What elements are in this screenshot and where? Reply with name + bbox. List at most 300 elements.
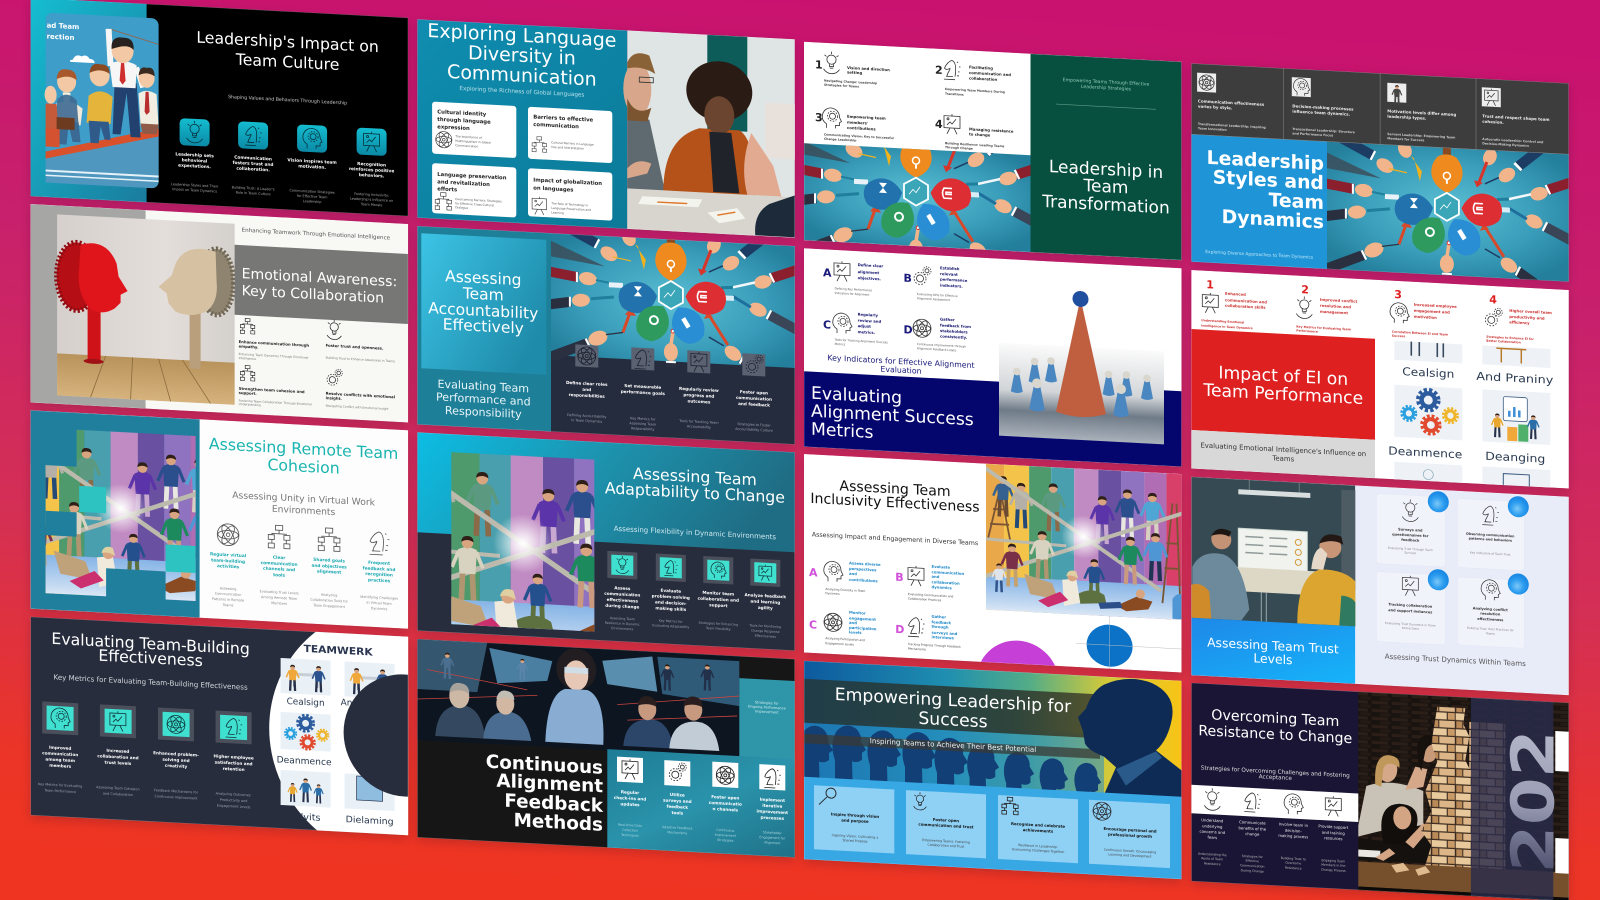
- column: team motivation: Communication Strategies: [290, 188, 335, 195]
- metric: collaboration: Assessing Team Cohesion: [96, 785, 140, 791]
- item C: Analyzing Participation and: [825, 636, 865, 642]
- metric: collaboration: collaboration and: [97, 753, 139, 760]
- column: feedback: recognition: [365, 571, 393, 579]
- item 2: communication and: [969, 70, 1011, 77]
- column: feedback: feedback and: [363, 565, 395, 573]
- item 3: Correlation Between EI and Team: [1392, 330, 1448, 337]
- item 1: setting: [847, 69, 862, 75]
- column: shared goals: Analyzing: [321, 593, 337, 598]
- title: Levels: [1253, 650, 1292, 667]
- slide: Emotional Awareness: [31, 204, 408, 423]
- column: behavioral expectations: expectations.: [178, 163, 211, 170]
- item D: feedback from: [940, 323, 971, 329]
- item C: engagement: [849, 615, 876, 622]
- card: surveys: Surveys: [1405, 551, 1417, 555]
- metric: problem solving: Continuous Improvement: [154, 794, 198, 801]
- item B: Alignment Assessment: [917, 296, 951, 302]
- column: problem solving: Evaluating Adaptability: [652, 623, 689, 629]
- card: surveys: [1376, 488, 1449, 567]
- column: agility: Effectiveness: [755, 634, 776, 639]
- book-shaped cartoon illustration: [45, 12, 159, 188]
- item 4: [935, 113, 1014, 153]
- card: cultural identity: The Importance of: [454, 134, 483, 140]
- column: channels: n channels: [713, 806, 739, 813]
- slide: Leadership's Impact on Team Culture: [31, 0, 408, 216]
- item C: [823, 310, 888, 349]
- column: feedback: Foster open: [740, 389, 768, 396]
- item 4: Better Collaboration: [1486, 339, 1521, 344]
- column: problem solving: Evaluate: [661, 588, 681, 594]
- card: preservation: Dialogue: [455, 205, 468, 210]
- team cards: Deanging: [1485, 450, 1545, 466]
- slide: Assessing Team Accountability: [417, 197, 811, 445]
- column: trust: Autocratic Leadership: Control and: [1482, 137, 1543, 144]
- metric: problem solving: Enhanced problem-: [153, 750, 199, 758]
- item 1: Intelligence in Team Dynamics: [1201, 324, 1253, 330]
- column: collaboration: Team Flexibility: [705, 626, 731, 631]
- column: feedback: Identifying Challenges: [360, 595, 398, 601]
- card: observing: Observing communication: [1466, 532, 1515, 538]
- card: conflict: Building Trust: Best Practices for: [1467, 626, 1514, 632]
- item 2: Empowering Team Members During: [945, 87, 1005, 94]
- column: review: outcomes: [687, 398, 711, 405]
- column: trust: Trust and respect shape team: [1482, 113, 1550, 122]
- card: achievements: Recognize and celebrate: [1011, 821, 1065, 829]
- item: cohesion: Strengthen team cohesion and: [239, 386, 305, 394]
- title: Emotional Awareness:: [242, 266, 397, 290]
- column: communication: Resilience in Dynamic: [605, 621, 640, 627]
- slide: Assessing Remote Team Cohesion: [30, 410, 408, 629]
- item A: alignment: [858, 269, 879, 275]
- column: team-building: Patterns in Remote: [212, 597, 244, 603]
- side subtitle: Strategies for: [755, 700, 779, 706]
- item B: Collaboration Practices: [908, 597, 942, 602]
- column: communication: Communication effectiveness: [1198, 98, 1265, 107]
- column: team-building: activities: [217, 563, 240, 570]
- subtitle: Strategies for Overcoming Challenges and Fostering: [1201, 766, 1350, 779]
- subtitle: Assessing Unity in Virtual Work: [232, 490, 376, 509]
- blue title panel: [1191, 618, 1355, 684]
- title: Assessing Team: [839, 478, 951, 500]
- column: iterate: Implement: [760, 797, 785, 803]
- column: team-building: Teams: [222, 603, 234, 608]
- column: agility: Change Response: [751, 628, 780, 634]
- blue title panel: [1191, 134, 1327, 269]
- title: Team: [1269, 190, 1324, 214]
- crew illustration: [451, 452, 594, 632]
- item 1: Vision and direction: [847, 65, 890, 72]
- title: Team Performance: [1202, 381, 1363, 409]
- column: concerns: fears: [1208, 835, 1217, 840]
- card: barriers: Use and Interpretation: [551, 145, 584, 151]
- column: check-ins: check-ins and: [614, 795, 646, 802]
- item 2: collaboration: [969, 75, 997, 82]
- column: problem solving: and decision-: [655, 599, 687, 606]
- metric: collaboration: trust levels: [105, 760, 132, 766]
- column: trust: Decision-Making Dynamics: [1482, 141, 1529, 148]
- card: globalization: on languages: [533, 185, 573, 194]
- card: preservation: for Effective Cross-Cultural: [455, 201, 494, 207]
- title: Feedback: [504, 791, 604, 817]
- column: review: Accountability: [687, 424, 711, 430]
- item D: D: [895, 623, 904, 636]
- card: vision: Shared Purpose: [842, 838, 868, 844]
- column: feedback: [735, 353, 773, 433]
- team cards: And Praniny: [1476, 370, 1554, 387]
- column: shared goals: Collaboration Tools for: [310, 598, 349, 604]
- column: support: [1318, 795, 1349, 873]
- column: review: [678, 350, 719, 430]
- item: empathy: Enhancing Team Dynamics Through Emotional: [239, 352, 308, 360]
- item C: Regularly: [858, 312, 879, 318]
- column: channels: Clear: [273, 555, 286, 561]
- column: recognition: Leadership's Influence on: [350, 197, 393, 203]
- column: support: resources: [1324, 835, 1343, 841]
- item 2: Performance: [1296, 329, 1318, 334]
- item 3: 3: [1394, 288, 1402, 301]
- column: collaboration: [698, 556, 739, 632]
- column: recognition: Team Morale: [360, 202, 382, 207]
- column: feedback: in Virtual Team: [366, 601, 392, 606]
- column: channels: communication: [261, 560, 298, 568]
- card: preservation: and revitalization: [437, 179, 490, 188]
- column: concerns: Understand: [1201, 817, 1224, 823]
- item C: metrics.: [858, 329, 876, 335]
- item B: and: [932, 574, 940, 579]
- item A: [809, 558, 881, 598]
- column: communication: Team Innovation: [1198, 126, 1227, 132]
- item B: Evaluate: [932, 564, 950, 570]
- column: behavioral expectations: Leadership Styles and Their: [171, 182, 219, 189]
- book-shaped cartoon illustration: rection: [47, 33, 74, 42]
- title: Transformation: [1041, 192, 1170, 219]
- item 1: [815, 51, 890, 90]
- column: support: Change Process: [1321, 868, 1346, 873]
- jenga photo: [1358, 692, 1569, 900]
- slide: Evaluating Alignment Success Metrics: [804, 248, 1182, 467]
- column: roles: responsibilities: [569, 392, 605, 399]
- card: cultural identity: through language: [437, 117, 491, 126]
- item 2: [1296, 283, 1357, 336]
- item 4: efficiency: [1509, 319, 1530, 325]
- subtitle: Exploring Diverse Approaches to Team Dynamics: [1205, 249, 1314, 261]
- column: check-ins: [614, 756, 646, 838]
- column: recognition: [349, 127, 394, 208]
- subtitle: Evaluation: [880, 365, 922, 376]
- card: preservation: [432, 163, 516, 218]
- column: collaboration: Monitor team: [702, 590, 735, 597]
- teal side and icon panel: [607, 671, 795, 858]
- title: Success: [918, 709, 988, 732]
- metric: collaboration: and Collaboration: [103, 792, 133, 797]
- column: trust and collaboration: Communication: [234, 154, 272, 162]
- item 2: Facilitating: [969, 64, 993, 71]
- column: collaboration: support: [709, 602, 728, 608]
- item 1: Strategies for Teams: [824, 83, 859, 89]
- title: Methods: [514, 810, 603, 836]
- column: feedback: practices: [368, 577, 391, 584]
- card: tracking: and support instances: [1388, 608, 1432, 614]
- item 4: Managing resistance: [969, 126, 1014, 134]
- column: motivation: leadership types.: [1387, 114, 1427, 121]
- item B: B: [904, 272, 912, 285]
- footer text: Teams: [1271, 454, 1295, 463]
- card: achievements: Resilience in Leadership:: [1018, 843, 1058, 849]
- column: iterate: [757, 764, 788, 846]
- column: surveys: Utilize: [670, 792, 685, 798]
- column: trust: cohesion.: [1482, 119, 1504, 125]
- card: surveys: feedback: [1401, 538, 1420, 543]
- column: communication: Assess: [614, 585, 631, 591]
- card: preservation: Overcoming Barriers: Strategies: [455, 197, 502, 204]
- title: Key to Collaboration: [242, 283, 384, 307]
- card: achievements: achievements: [1023, 827, 1054, 834]
- title: Team: [1083, 176, 1128, 198]
- item A: Analyzing Diversity in Team: [825, 587, 866, 593]
- slide: Continuous Alignment Feedback: [417, 639, 795, 858]
- item 3: Empowering team: [847, 114, 886, 121]
- subtitle: Assessing Flexibility in Dynamic Environments: [614, 525, 776, 541]
- title: Leadership's Impact on: [196, 27, 379, 56]
- title: Alignment: [496, 771, 603, 797]
- blue target circle: [1076, 614, 1182, 673]
- card: tracking: Tracking collaboration: [1388, 602, 1433, 609]
- title: Assessing Team Trust: [1207, 635, 1339, 657]
- card: tracking: Evaluating Trust Dynamics in Team: [1385, 621, 1436, 628]
- title: Empowering Leadership for: [835, 685, 1072, 717]
- card: globalization: Language Preservation and: [551, 206, 591, 212]
- column: communication: varies by style.: [1198, 104, 1233, 111]
- column: benefits: Communication: [1240, 863, 1265, 869]
- footer text: Evaluating Emotional Intelligence's Influence on: [1200, 441, 1366, 458]
- white circular panel: Cealsign: [287, 697, 325, 709]
- item: conflicts: insight.: [326, 395, 342, 401]
- column: surveys: surveys and: [663, 798, 692, 804]
- item C: Tools for Tracking Alignment Success: [834, 338, 888, 344]
- column: benefits: Effective: [1246, 859, 1259, 863]
- column: communication: communication: [604, 591, 640, 598]
- column: communication: Environments: [611, 626, 634, 631]
- item 3: members': [847, 119, 868, 126]
- subtitle: Performance and: [436, 390, 531, 409]
- item D: stakeholders: [940, 328, 968, 335]
- white circular panel: Deanmence: [277, 755, 332, 768]
- item C: Monitor: [849, 610, 866, 616]
- column: agility: [745, 558, 786, 639]
- item: trust: Building Trust to Enhance Awareness in Teams: [326, 356, 395, 363]
- item B: Evaluating KPIs for Effective: [917, 292, 958, 298]
- column: problem solving: Key Metrics for: [659, 619, 683, 624]
- subtitle: Responsibility: [445, 404, 522, 421]
- column: goals: performance goals: [621, 389, 665, 396]
- column: roles: Define clear roles: [566, 380, 608, 387]
- card: observing: patterns and behaviors: [1469, 536, 1512, 543]
- item D: [895, 612, 961, 653]
- item B: Establish: [940, 265, 960, 271]
- item: empathy: Intelligence: [239, 356, 256, 361]
- item 4: Through Change: [945, 145, 973, 151]
- item C: adjust: [858, 323, 871, 329]
- title: Leadership in: [1049, 157, 1163, 183]
- column: motivation: Servant Leadership: Empowering Team: [1387, 132, 1455, 140]
- card: globalization: Impact of globalization: [533, 177, 602, 187]
- metric: communication: members: [49, 763, 72, 769]
- item B: collaboration: [932, 579, 960, 586]
- title: Dynamics: [1222, 207, 1324, 233]
- metric: problem solving: solving and: [162, 757, 190, 763]
- card: barriers: Barriers to effective: [533, 114, 594, 124]
- title: Exploring Language: [427, 20, 616, 52]
- item 1: communication and: [1225, 297, 1267, 305]
- item B: indicators.: [940, 283, 963, 289]
- item 3: 3: [815, 111, 823, 124]
- column: benefits: During Change: [1241, 868, 1264, 874]
- column: team motivation: motivation.: [298, 163, 326, 171]
- column: feedback: communication: [736, 395, 772, 402]
- slide: Assessing Team Adaptability: [365, 430, 795, 690]
- column: roles: Defining Accountability: [567, 413, 606, 419]
- metric: communication: Key Metrics for Evaluating: [38, 782, 82, 788]
- title: Leadership: [1207, 148, 1324, 175]
- column: channels: Foster open: [711, 794, 739, 801]
- item B: communication: [932, 569, 964, 576]
- card: cultural identity: Multilingualism in Global: [455, 139, 491, 145]
- card: achievements: Overcoming Challenges Together: [1012, 847, 1065, 854]
- item D: Alignment Feedback Loops: [917, 346, 956, 352]
- card: growth: Encourage personal and: [1103, 826, 1157, 834]
- title: Inclusivity Effectiveness: [810, 491, 980, 516]
- column: motivation: Members for Success: [1387, 136, 1425, 142]
- column: concerns: Resistance: [1204, 861, 1221, 866]
- item C: participation: [849, 625, 877, 631]
- item A: A: [823, 266, 832, 280]
- grey footer: [1191, 430, 1375, 478]
- column: team-building: Regular virtual: [210, 551, 247, 559]
- item: cohesion: Understanding: [239, 402, 261, 407]
- magenta circle: [977, 638, 1059, 725]
- column: channels: Strategies: [717, 838, 734, 843]
- metric: satisfaction: Engagement Levels: [217, 804, 251, 809]
- item A: Defining Key Performance: [835, 286, 872, 292]
- item 4: Building Resilience: Leading Teams: [945, 141, 1005, 148]
- card: conflict: Analyzing conflict: [1473, 606, 1508, 612]
- item 3: Increased employee: [1414, 302, 1457, 309]
- card: trust: Empowering Teams: Fostering: [922, 838, 970, 844]
- column: channels: Members: [271, 601, 287, 606]
- column: goals: Assessing Team: [629, 421, 657, 427]
- column: channels: Improvement: [715, 833, 737, 838]
- column: decisions: Overcome: [1285, 861, 1301, 866]
- title: Styles and: [1213, 167, 1324, 194]
- rotated year text: 202: [1498, 728, 1567, 875]
- stepped crew illustration: [30, 410, 196, 616]
- column: surveys: feedback: [667, 804, 688, 810]
- metric: communication: among team: [45, 756, 76, 763]
- column: review: Regularly review: [679, 386, 719, 393]
- item 2: [935, 60, 1011, 99]
- card: barriers: [528, 107, 612, 163]
- column: team-building: team-building: [211, 557, 245, 565]
- subtitle: Key Indicators for Effective Alignment: [827, 353, 975, 370]
- column: feedback: [360, 531, 398, 612]
- item 1: [1201, 278, 1267, 331]
- column: goals: Key Metrics for: [630, 416, 656, 422]
- card: growth: professional growth: [1108, 832, 1152, 839]
- card: globalization: Learning: [551, 210, 564, 215]
- item 1: 1: [815, 58, 823, 72]
- item 4: 4: [935, 118, 943, 131]
- item B: B: [895, 571, 904, 584]
- column: channels: tools: [273, 572, 286, 579]
- column: benefits: change: [1245, 831, 1260, 837]
- team cards: Deanmence: [1388, 444, 1463, 461]
- column: decision-making: Decision-making processes: [1292, 103, 1354, 112]
- card: vision: [814, 785, 894, 853]
- item: trust: [326, 319, 395, 363]
- item D: Gather: [932, 614, 946, 620]
- item B: Evaluating Communication and: [908, 592, 954, 598]
- column: communication: effectiveness: [607, 597, 638, 604]
- column: feedback: Accountability Culture: [735, 427, 773, 433]
- title: Resistance to Change: [1198, 723, 1352, 747]
- card: trust: [906, 790, 986, 858]
- card: growth: Learning and Development: [1108, 852, 1152, 859]
- item A: objectives.: [858, 275, 881, 281]
- card: globalization: [528, 168, 612, 221]
- subtitle: Evaluating Team: [438, 378, 529, 395]
- column: benefits: benefits of the: [1238, 825, 1267, 832]
- item: cohesion: [239, 365, 312, 410]
- metric: communication: Team Performance: [43, 788, 76, 794]
- column: feedback: Frequent: [368, 560, 390, 567]
- card: surveys: Evaluating Trust Through Team: [1388, 546, 1433, 552]
- column: team motivation: [287, 124, 337, 205]
- slide: Overcoming Team Resistance: [1191, 683, 1569, 900]
- column: communication: [1197, 73, 1266, 134]
- column: team motivation: for Effective Team: [297, 194, 328, 199]
- column: iterate: processes: [761, 815, 785, 821]
- slide: Assessing Team Inclusivity: [804, 444, 1202, 733]
- navy band: [804, 371, 1182, 467]
- column: decisions: making process: [1278, 833, 1308, 839]
- item: cohesion: Fostering Team Collaboration Through Emotional: [239, 399, 312, 406]
- card: vision: Inspire through vision: [831, 811, 879, 819]
- holographic team photo: [417, 639, 739, 757]
- card: cultural identity: [432, 102, 516, 158]
- white circular panel: [269, 632, 408, 836]
- card: vision: and purpose: [841, 817, 869, 824]
- item 3: Success: [1392, 334, 1405, 338]
- column: motivation: Motivation levels differ among: [1387, 108, 1456, 117]
- item 1: Navigating Change: Leadership: [824, 78, 878, 85]
- item 3: motivation: [1414, 314, 1437, 320]
- column: check-ins: Regular: [621, 789, 640, 795]
- column: communication: [604, 551, 640, 632]
- side subtitle: Improvement: [755, 709, 779, 715]
- title: Adaptability to Change: [605, 478, 785, 507]
- card: cultural identity: Communication: [455, 143, 478, 149]
- item A: Define clear: [858, 262, 883, 269]
- column: concerns: concerns and: [1200, 829, 1226, 835]
- metric: problem solving: [153, 707, 199, 801]
- green panel: [1030, 54, 1182, 260]
- card: conflict: effectiveness: [1477, 617, 1503, 622]
- column: decision-making: Transactional Leadership: Structure: [1292, 127, 1355, 134]
- column: problem solving: making skills: [655, 605, 687, 612]
- card: globalization: The Role of Technology in: [550, 201, 588, 207]
- team cards: Cealsign: [1402, 365, 1454, 381]
- card: trust: Collaboration and Trust: [928, 843, 965, 849]
